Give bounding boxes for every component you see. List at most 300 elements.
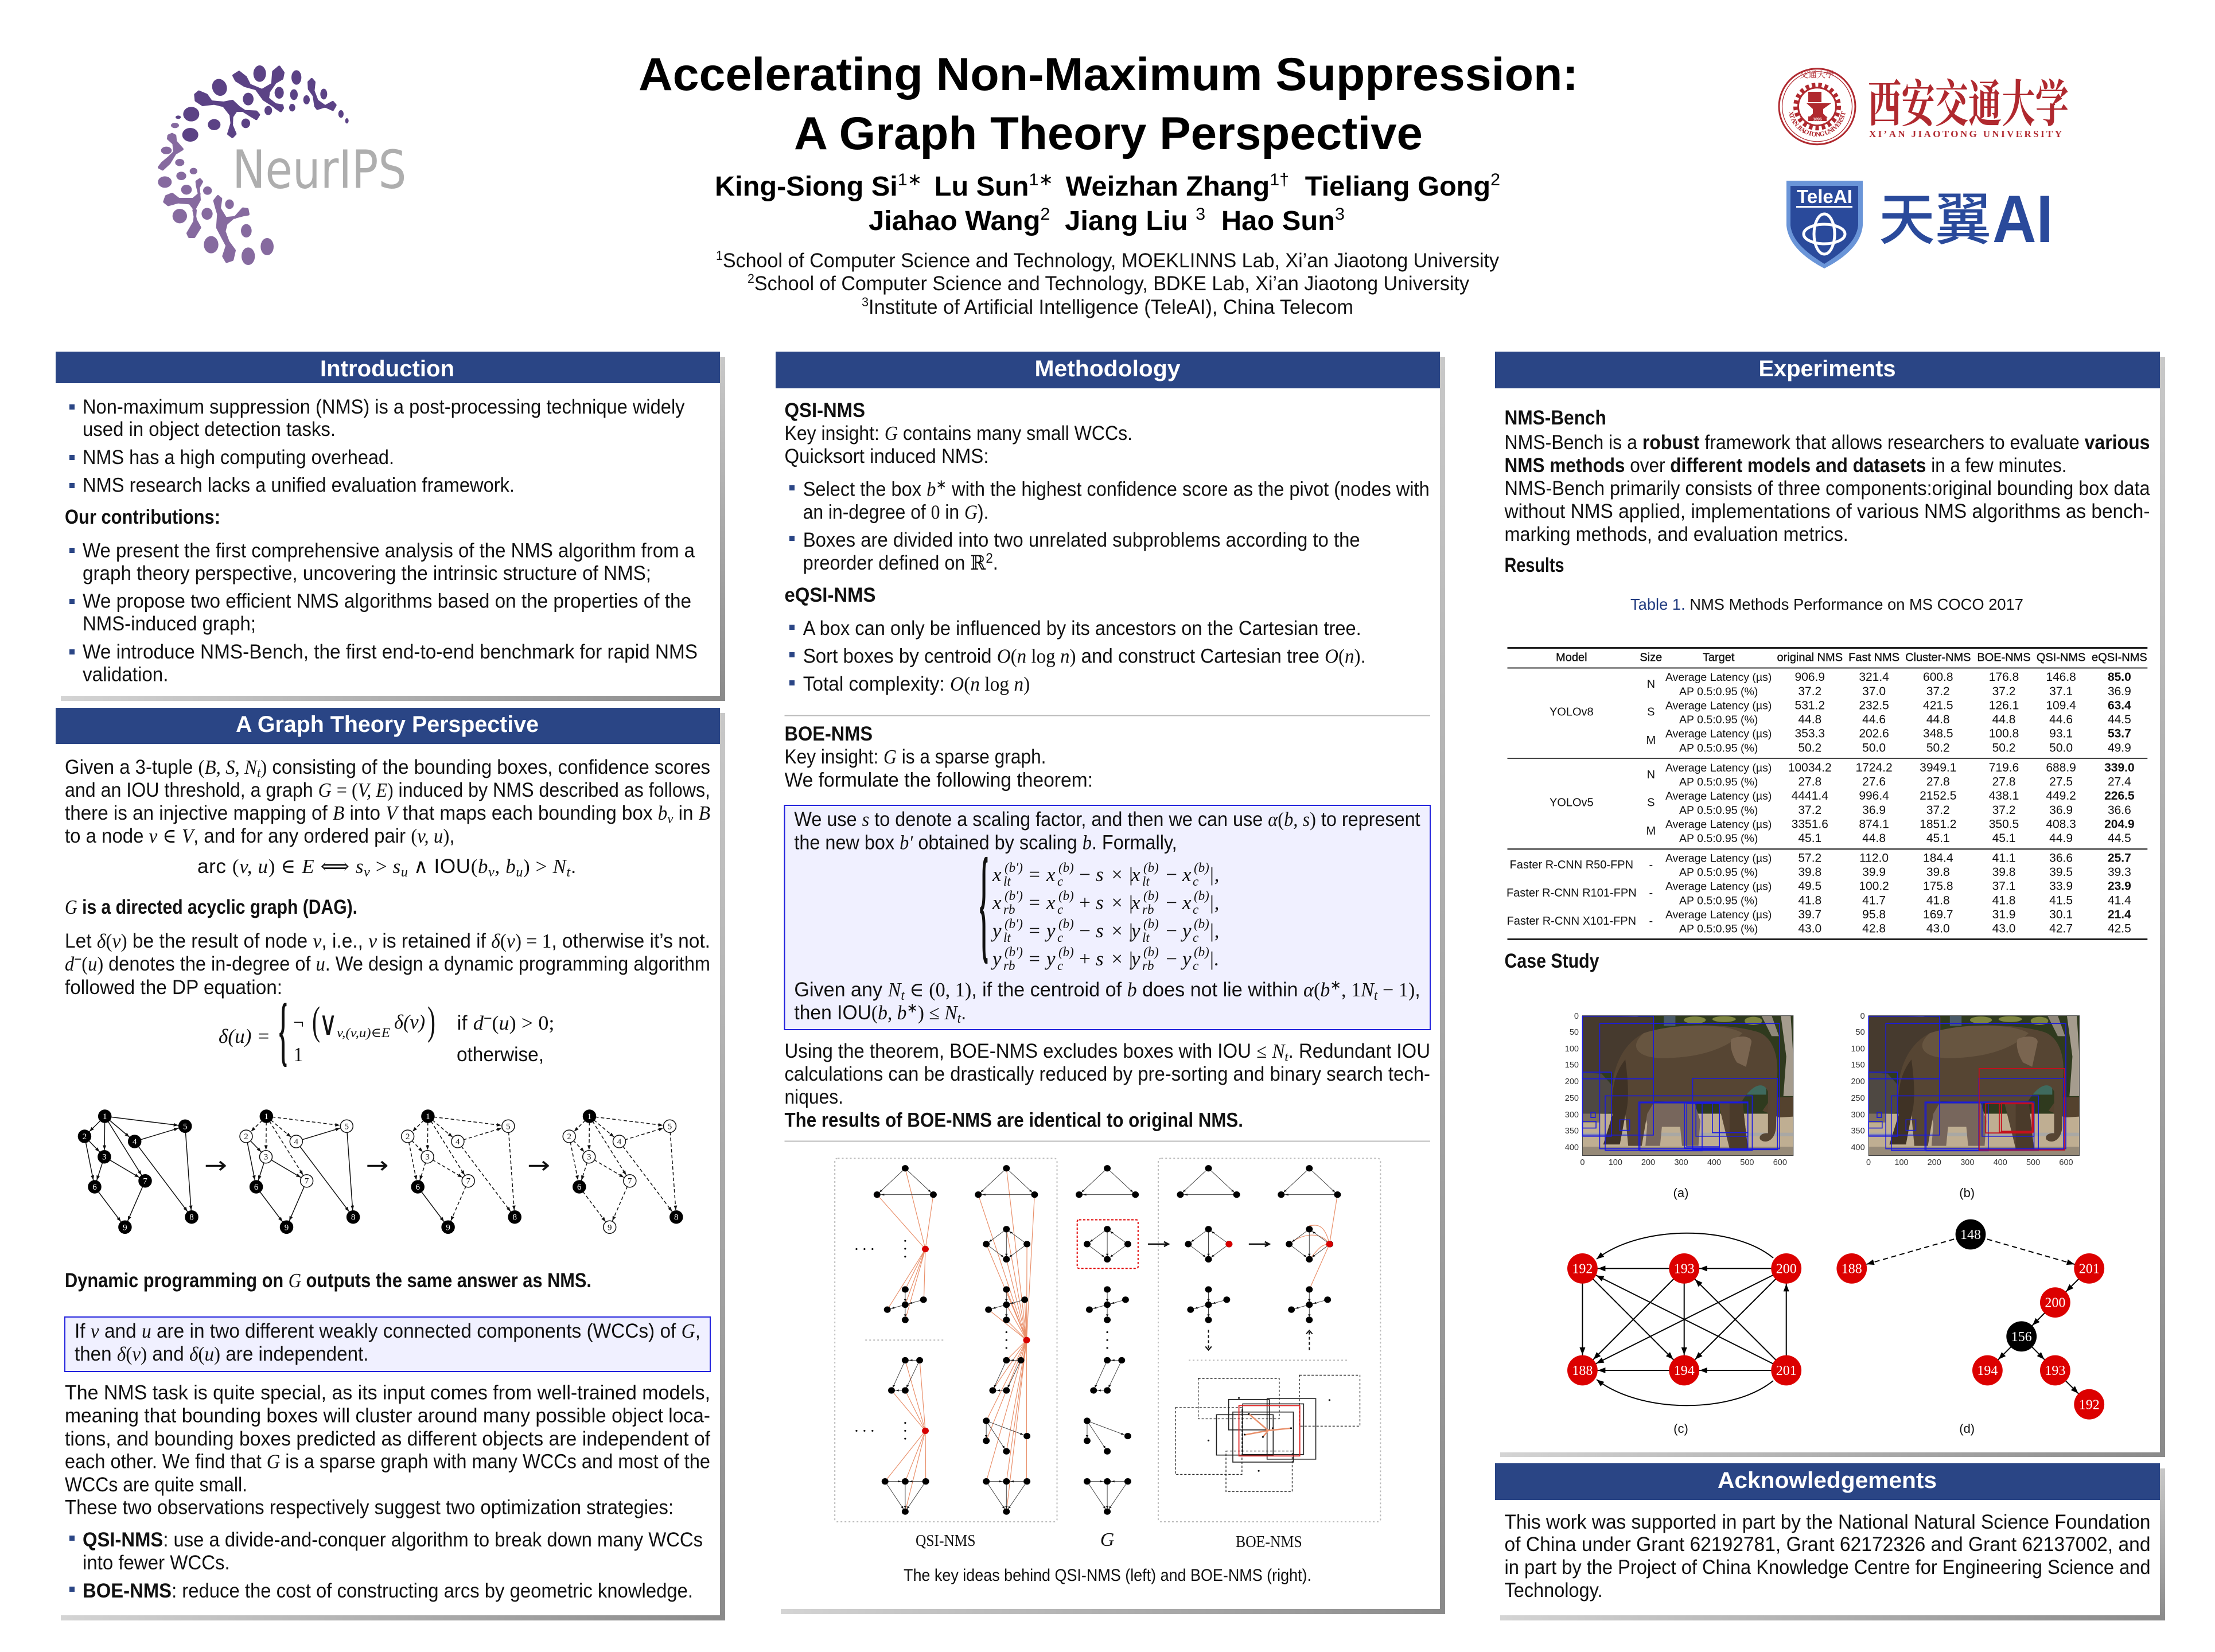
callout: scaling theorem: , 1 [1341,979,1361,1001]
authors: King-Siong Si [715,172,896,202]
bullet list: intro points: used in object detection tasks. [83,418,336,441]
graph: step 3: 9 [446,1223,450,1232]
equation: scaled box system: |, [1209,863,1219,886]
authors: Jiang Liu [1057,206,1196,236]
table row labels: M [1646,825,1656,837]
equation: scaled box system: s [1096,948,1104,970]
section: eQSI-NMS: A box can only be influenced by its ancestors on the Cartesian tree. [803,617,1361,640]
heading: Methodology: Methodology [1035,356,1181,381]
logo: TeleAI: AI [1992,181,2053,256]
diagram: overlapping bounding boxes [1175,1375,1360,1492]
table body: 39.3 [2108,866,2131,879]
callout: scaling theorem: ∗ [1330,977,1341,993]
chart: Cartesian tree (d): 188 [1842,1262,1862,1277]
equation: DP recurrence: 1 [293,1043,303,1066]
bullet list: optimization strategies: BOE-NMS: reduce the cost of constructing arcs by geometric knowledge. [83,1580,693,1602]
table body: AP 0.5:0.95 (%) [1679,923,1758,936]
table body: 37.2 [1926,685,1950,698]
section: eQSI-NMS: Sort boxes by centroid O(n log n) and construct Cartesian tree O(n). [803,645,1366,668]
table body: Average Latency (µs) [1665,790,1772,802]
chart: detections (a): 600 [1773,1158,1787,1167]
equation: scaled box system: | [1128,863,1134,886]
equation: arc definition: , b [495,855,516,878]
arrow [1148,1242,1169,1246]
authors: 1∗ [898,170,922,189]
table body: 204.9 [2104,817,2135,831]
logo: NeurIPS [158,65,406,265]
table row labels: Faster R-CNN X101-FPN [1506,915,1636,928]
table body: 874.1 [1859,817,1889,831]
table header: Target [1703,652,1735,664]
table body: AP 0.5:0.95 (%) [1679,866,1758,879]
graph: step 2: 2 [244,1132,248,1141]
callout: scaling theorem: t [901,988,905,1003]
chart: detections (a): 50 [1570,1028,1579,1037]
equation: arc definition: s [393,855,400,878]
bullet list: optimization strategies: QSI-NMS: use a divide-and-conquer algorithm to break down many WCCs [83,1529,703,1551]
graph: step 4: 9 [608,1223,612,1232]
table body: 36.6 [2108,804,2131,817]
table body: 45.1 [1992,832,2015,845]
table body: 42.8 [1862,922,1886,936]
table body: 3351.6 [1792,817,1828,831]
table body: 44.8 [1926,713,1950,726]
chart: detections (b): 400 [1994,1158,2007,1167]
affiliations: 1 [716,248,723,263]
bullet list: contributions: graph theory perspective, uncovering the intrinsic structure of NMS; [83,562,651,585]
equation: scaled box system: x [992,863,1002,886]
table body: 36.6 [2049,851,2073,864]
chart: detections (a): 200 [1641,1158,1655,1167]
text block: NMS task observations: These two observations respectively suggest two optimization strategies: [65,1496,674,1519]
table body: 1851.2 [1920,817,1956,831]
equation: scaled box system: c [1057,959,1063,973]
section: QSI-NMS: . [993,552,998,574]
table body: 126.1 [1989,699,2019,712]
equation: scaled box system: rb [1142,902,1154,917]
table header: Model [1556,652,1587,664]
equation: DP recurrence: if d [457,1012,483,1034]
text block: BOE-NMS summary: calculations can be drastically reduced by pre-sorting and binary search tech- [785,1063,1430,1085]
table header: original NMS [1777,652,1843,664]
callout: scaling theorem: the new box b′ obtained by scaling b. Formally, [794,832,1177,854]
diagram: BOE-NMS first column [1177,1165,1240,1350]
graph: step 3: 6 [415,1183,420,1192]
table body: 85.0 [2108,671,2131,684]
graph: step 1: 9 [123,1223,127,1232]
graph: step 4: 6 [577,1183,582,1192]
table body: 353.3 [1795,727,1825,741]
equation: scaled box system: rb [1003,959,1015,973]
table body: AP 0.5:0.95 (%) [1679,832,1758,845]
table body: 43.0 [1992,922,2015,936]
text block: definition: in [673,802,699,824]
table body: 39.8 [1992,866,2015,879]
equation: DP recurrence [219,989,554,1074]
table body: 44.6 [2049,713,2073,726]
panel: Introduction [56,352,725,701]
equation: scaled box system: y [1130,919,1140,942]
table row labels: - [1649,887,1653,899]
table body: 50.0 [1862,741,1886,754]
table body: 321.4 [1859,671,1889,684]
section: QSI-NMS: ∗ [936,477,947,492]
equation: scaled box system: s [1096,891,1104,914]
table body: AP 0.5:0.95 (%) [1679,714,1758,726]
table row labels: - [1649,915,1653,928]
text block: NMS task observations: meaning that bounding boxes will cluster around many possible object loca- [65,1404,710,1427]
graph: step 4: 3 [587,1153,591,1162]
label: QSI-NMS: QSI-NMS [916,1532,975,1550]
section: eQSI-NMS: eQSI-NMS [785,584,875,606]
table body: 202.6 [1859,727,1889,741]
table body: 339.0 [2104,761,2135,774]
table body: 232.5 [1859,699,1889,712]
equation: arc definition: . [571,855,576,878]
equation: scaled box system: lt [1003,874,1011,889]
equation: DP recurrence: − [484,1011,492,1026]
text block: definition: consisting of the bounding boxes, confidence scores [273,756,738,778]
equation: DP recurrence: u) > 0; [499,1012,553,1034]
table body: 45.1 [1926,832,1950,845]
equation: arc definition: arc (v, u) ∈ E ⟺ s [197,855,364,878]
equation: DP recurrence: δ(u) = [219,1025,270,1047]
chart: detections (a) [1565,1012,1793,1200]
table body: 27.5 [2049,776,2073,789]
table body: 408.3 [2046,817,2076,831]
equation: scaled box system: c [1193,959,1198,973]
callout: scaling theorem: Given any N [794,979,901,1001]
table body: AP 0.5:0.95 (%) [1679,742,1758,754]
text block: definition [65,756,710,847]
text block: BOE-NMS summary: Using the theorem, BOE-NMS excludes boxes with IOU ≤ N [785,1040,1286,1062]
chart: graph (c): 193 [1674,1262,1695,1277]
table body: 39.8 [1798,866,1821,879]
table body: 37.2 [1992,804,2015,817]
graph: step 1: 3 [102,1153,107,1162]
bullet list: contributions: validation. [83,663,169,686]
equation: scaled box system: − [1165,891,1178,914]
table body: 21.4 [2108,908,2131,921]
equation: scaled box system: lt [1142,930,1150,945]
chart: detections (b): 0 [1866,1158,1871,1167]
table header: QSI-NMS [2037,652,2085,664]
table body: 42.7 [2049,922,2073,936]
logo wordmark: 天翼AI: 天翼 [1879,174,1991,256]
table body: 39.5 [2049,866,2073,879]
text block: dynamic programming: u) denotes the in-degree of u. We design a dynamic programming algorithm [88,953,740,975]
graph: step 2 [240,1110,360,1233]
equation: DP recurrence: v,(v,u)∈E [337,1026,390,1040]
table body: 23.9 [2108,880,2131,893]
table body: Average Latency (µs) [1665,699,1772,712]
table body: 36.9 [2049,804,2073,817]
table header: BOE-NMS [1977,652,2031,664]
bullet list: contributions: We introduce NMS-Bench, the first end-to-end benchmark for rapid NMS [83,641,698,663]
table body: 27.4 [2108,776,2131,789]
table body: 50.2 [1926,741,1950,754]
table row labels: - [1649,859,1653,871]
chart: detections (a): 400 [1565,1143,1579,1152]
affiliations [716,248,1499,318]
graph: step 1: 4 [133,1137,137,1147]
arrow: → [204,1152,227,1179]
table body: 49.5 [1798,880,1821,893]
text block: funding: in part by the Project of China Knowledge Centre for Engineering Science and [1504,1556,2150,1579]
text block: NMS-Bench: NMS-Bench primarily consists of three components:original bounding box data [1504,477,2150,500]
table body: 531.2 [1795,699,1825,712]
equation: scaled box system: = [1027,948,1041,970]
equation: scaled box system: (b) [1194,889,1209,903]
section: QSI-NMS: an in-degree of 0 in G). [803,501,988,523]
callout: scaling theorem: . [961,1002,966,1024]
caption: Table 1: Table 1. NMS Methods Performance on MS COCO 2017 [1630,595,2023,613]
table body: 37.1 [1992,880,2015,893]
table body: 421.5 [1923,699,1953,712]
equation: scaled box system: | [1128,891,1134,914]
table body: 100.8 [1989,727,2019,741]
chart: Cartesian tree (d): 201 [2079,1262,2100,1277]
equation: scaled box system: (b′) [1005,889,1023,903]
equation: scaled box system: (b) [1143,917,1159,931]
equation: scaled box system: (b) [1194,945,1209,959]
equation: scaled box system: |. [1209,948,1219,970]
bullet list: contributions: NMS-induced graph; [83,613,256,635]
table body: 95.8 [1862,908,1886,921]
chart: detections (b): 100 [1851,1045,1865,1054]
chart: Cartesian tree (d) [1836,1219,2104,1436]
icon: TeleAI shield: TeleAI [1797,186,1852,207]
table body: 30.1 [2049,908,2073,921]
panel: Methodology [776,352,1445,1614]
graph: step 4: 4 [617,1137,622,1147]
table body: 2152.5 [1920,789,1956,802]
section: BOE-NMS: We formulate the following theorem: [785,769,1093,792]
table body: 438.1 [1989,789,2019,802]
section: QSI-NMS [785,399,1430,574]
section: QSI-NMS: QSI-NMS [785,399,865,422]
graph: step 3: 1 [426,1112,430,1121]
bullet list: intro points: NMS research lacks a unified evaluation framework. [83,474,515,497]
equation: scaled box system: y [1045,919,1056,942]
chart: detections (a): 400 [1707,1158,1721,1167]
chart: Cartesian tree (d): 193 [2045,1363,2065,1378]
equation: scaled box system: | [1128,919,1134,942]
text block: NMS task observations [65,1381,710,1519]
table row labels: YOLOv5 [1550,796,1594,809]
table body: 226.5 [2104,789,2135,802]
table body: 688.9 [2046,761,2076,774]
equation: DP recurrence: ( [492,1012,499,1034]
figure: case study [1565,1012,2104,1436]
text block: dynamic programming [65,930,710,999]
equation: scaled box system: (b) [1058,889,1074,903]
table body: 4441.4 [1792,789,1828,802]
section: QSI-NMS: Quicksort induced NMS: [785,445,989,467]
text block: NMS-Bench: NMS methods over different models and datasets in a few minutes. [1504,454,2066,477]
chart: detections (b): 400 [1851,1143,1865,1152]
table header: Cluster-NMS [1905,652,1971,664]
table body: Average Latency (µs) [1665,762,1772,774]
table body: 37.2 [1798,804,1821,817]
callout: WCC independence: If v and u are in two different weakly connected components (WCCs) of G, [75,1320,700,1342]
table body: 41.8 [1798,894,1821,907]
chart: Cartesian tree (d): 148 [1960,1228,1981,1242]
table row labels: N [1647,678,1655,691]
table body: 719.6 [1989,761,2019,774]
equation: DP recurrence: ( [312,999,320,1043]
text block: definition: v [667,812,674,827]
equation: scaled box system: = [1027,891,1041,914]
logo: TeleAI [1786,174,2053,268]
heading: Experiments: Experiments [1759,356,1895,381]
equation: scaled box system: = [1027,919,1041,942]
diagram: graph G column [1076,1165,1139,1515]
table body: 50.2 [1992,741,2015,754]
equation: scaled box system: − [1078,919,1092,942]
table body: 44.5 [2108,713,2131,726]
authors: Jiahao Wang [869,206,1037,236]
table body: 25.7 [2108,851,2131,864]
icon: TeleAI shield [1786,181,1863,268]
equation: scaled box system: | [1128,948,1134,970]
section: eQSI-NMS [785,584,1366,695]
equation: scaled box system: s [1096,863,1104,886]
table body: 100.2 [1859,880,1889,893]
chart: detections (a): 200 [1565,1077,1579,1086]
equation: scaled box system: (b′) [1005,945,1023,959]
chart: detections (b): 500 [2026,1158,2040,1167]
figure: QSI-NMS and BOE-NMS key ideas [835,1158,1380,1585]
chart: detections (b): 300 [1851,1111,1865,1120]
table row labels: N [1647,769,1655,781]
authors: 2 [1040,205,1050,224]
table body: 44.9 [2049,832,2073,845]
equation: arc definition: ∧ [408,855,434,878]
chart: graph (c): (c) [1673,1421,1688,1436]
equation: arc definition: t [566,865,571,880]
table body: 906.9 [1795,671,1825,684]
callout: scaling theorem: , if the centroid of b does not lie within α(b [971,979,1330,1001]
table row labels: S [1647,706,1655,718]
equation: arc definition: u [401,865,408,880]
affiliations: 3 [862,295,869,309]
equation: scaled box system: y [1130,948,1140,970]
table body: 49.9 [2108,741,2131,754]
affiliations: School of Computer Science and Technology, BDKE Lab, Xi’an Jiaotong University [754,272,1469,295]
chart: detections (b): 100 [1894,1158,1909,1167]
graph: step 4: 5 [668,1122,672,1131]
graph: step 2: 3 [264,1153,268,1162]
diagram: QSI-NMS first column [855,1165,944,1515]
equation: scaled box system: x [1131,863,1140,886]
equation: DP recurrence: otherwise, [457,1043,544,1066]
equation: scaled box system: (b) [1194,860,1209,875]
chart: detections (b): 350 [1851,1127,1865,1136]
table body: 37.0 [1862,685,1886,698]
table body: 42.5 [2108,922,2131,936]
chart: detections (a): 350 [1565,1127,1579,1136]
graph: step 2: 1 [264,1112,268,1121]
equation: scaled box system: y [1181,919,1192,942]
heading: A Graph Theory Perspective: A Graph Theory Perspective [236,712,539,737]
table row labels: YOLOv8 [1550,706,1594,718]
text block: NMS-Bench: NMS-Bench [1504,407,1606,429]
graph: step 1: 2 [83,1132,87,1141]
heading: Case Study: Case Study [1504,950,1599,972]
chart: Cartesian tree (d): 192 [2079,1397,2100,1412]
table body: 184.4 [1923,851,1953,864]
callout: scaling theorem: − 1) [1377,979,1415,1001]
equation: scaled box system: c [1057,930,1063,945]
chart: graph (c) [1567,1233,1801,1436]
table body: 37.1 [2049,685,2073,698]
table body [1665,671,2135,936]
callout: scaling theorem: ∈ (0, 1) [905,979,971,1001]
graph: step 3: 2 [406,1132,410,1141]
section: eQSI-NMS: Total complexity: O(n log n) [803,673,1030,695]
chart: Cartesian tree (d): 156 [2011,1330,2032,1345]
text block: definition: t [257,766,262,781]
chart: detections (a): 150 [1565,1061,1579,1070]
bullet list: contributions: We propose two efficient NMS algorithms based on the properties of the [83,590,691,613]
chart: Cartesian tree (d): (d) [1959,1421,1975,1436]
equation: scaled box system: { [979,832,988,975]
equation: scaled box system: (b) [1143,860,1159,875]
table body: Average Latency (µs) [1665,728,1772,741]
graph: step 2: 5 [345,1122,349,1131]
equation: scaled box system: × [1110,891,1124,914]
text block: funding: Technology. [1504,1579,1603,1602]
chart: detections (a): 100 [1565,1045,1579,1054]
callout: scaling theorem: t [957,1011,961,1026]
table row labels: M [1646,734,1656,747]
logo wordmark: English name: XI’AN JIAOTONG UNIVERSITY [1869,128,2062,139]
table body: 39.7 [1798,908,1821,921]
heading: Our contributions: Our contributions: [65,506,220,528]
equation: scaled box system: |, [1209,891,1219,914]
equation: scaled box system: − [1165,948,1178,970]
callout: scaling theorem: t [1374,988,1379,1003]
table body: 41.8 [1992,894,2015,907]
table body: 44.8 [1862,832,1886,845]
table header: eQSI-NMS [2092,652,2147,664]
equation: arc definition: u [516,865,523,880]
equation: arc definition: ) > [523,855,552,878]
bullet list: optimization strategies: into fewer WCCs. [83,1552,230,1574]
bullet list: contributions: We present the first comprehensive analysis of the NMS algorithm from a [83,539,695,562]
table body: 45.1 [1798,832,1821,845]
diagram frame: BOE-NMS dotted panel [1158,1158,1380,1522]
graph: step 3: 8 [512,1213,517,1222]
table body: Average Latency (µs) [1665,818,1772,831]
equation: scaled box system: c [1193,902,1198,917]
chart: dynamic programming graph sequence [78,1110,683,1233]
chart: detections (a): (a) [1673,1186,1688,1200]
table body: 169.7 [1923,908,1953,921]
text block: dynamic programming: followed the DP equation: [65,976,282,999]
table body: 36.9 [2108,685,2131,698]
authors [715,170,1500,236]
table body: 33.9 [2049,880,2073,893]
text block: definition: ) [260,756,267,778]
section: QSI-NMS: with the highest confidence score as the pivot (nodes with [947,478,1430,500]
graph: step 2: 9 [285,1223,289,1232]
chart: detections (a): 0 [1574,1012,1579,1021]
equation: scaled box system: x [1182,863,1192,886]
equation: scaled box system: y [991,948,1002,970]
table body: Average Latency (µs) [1665,880,1772,893]
